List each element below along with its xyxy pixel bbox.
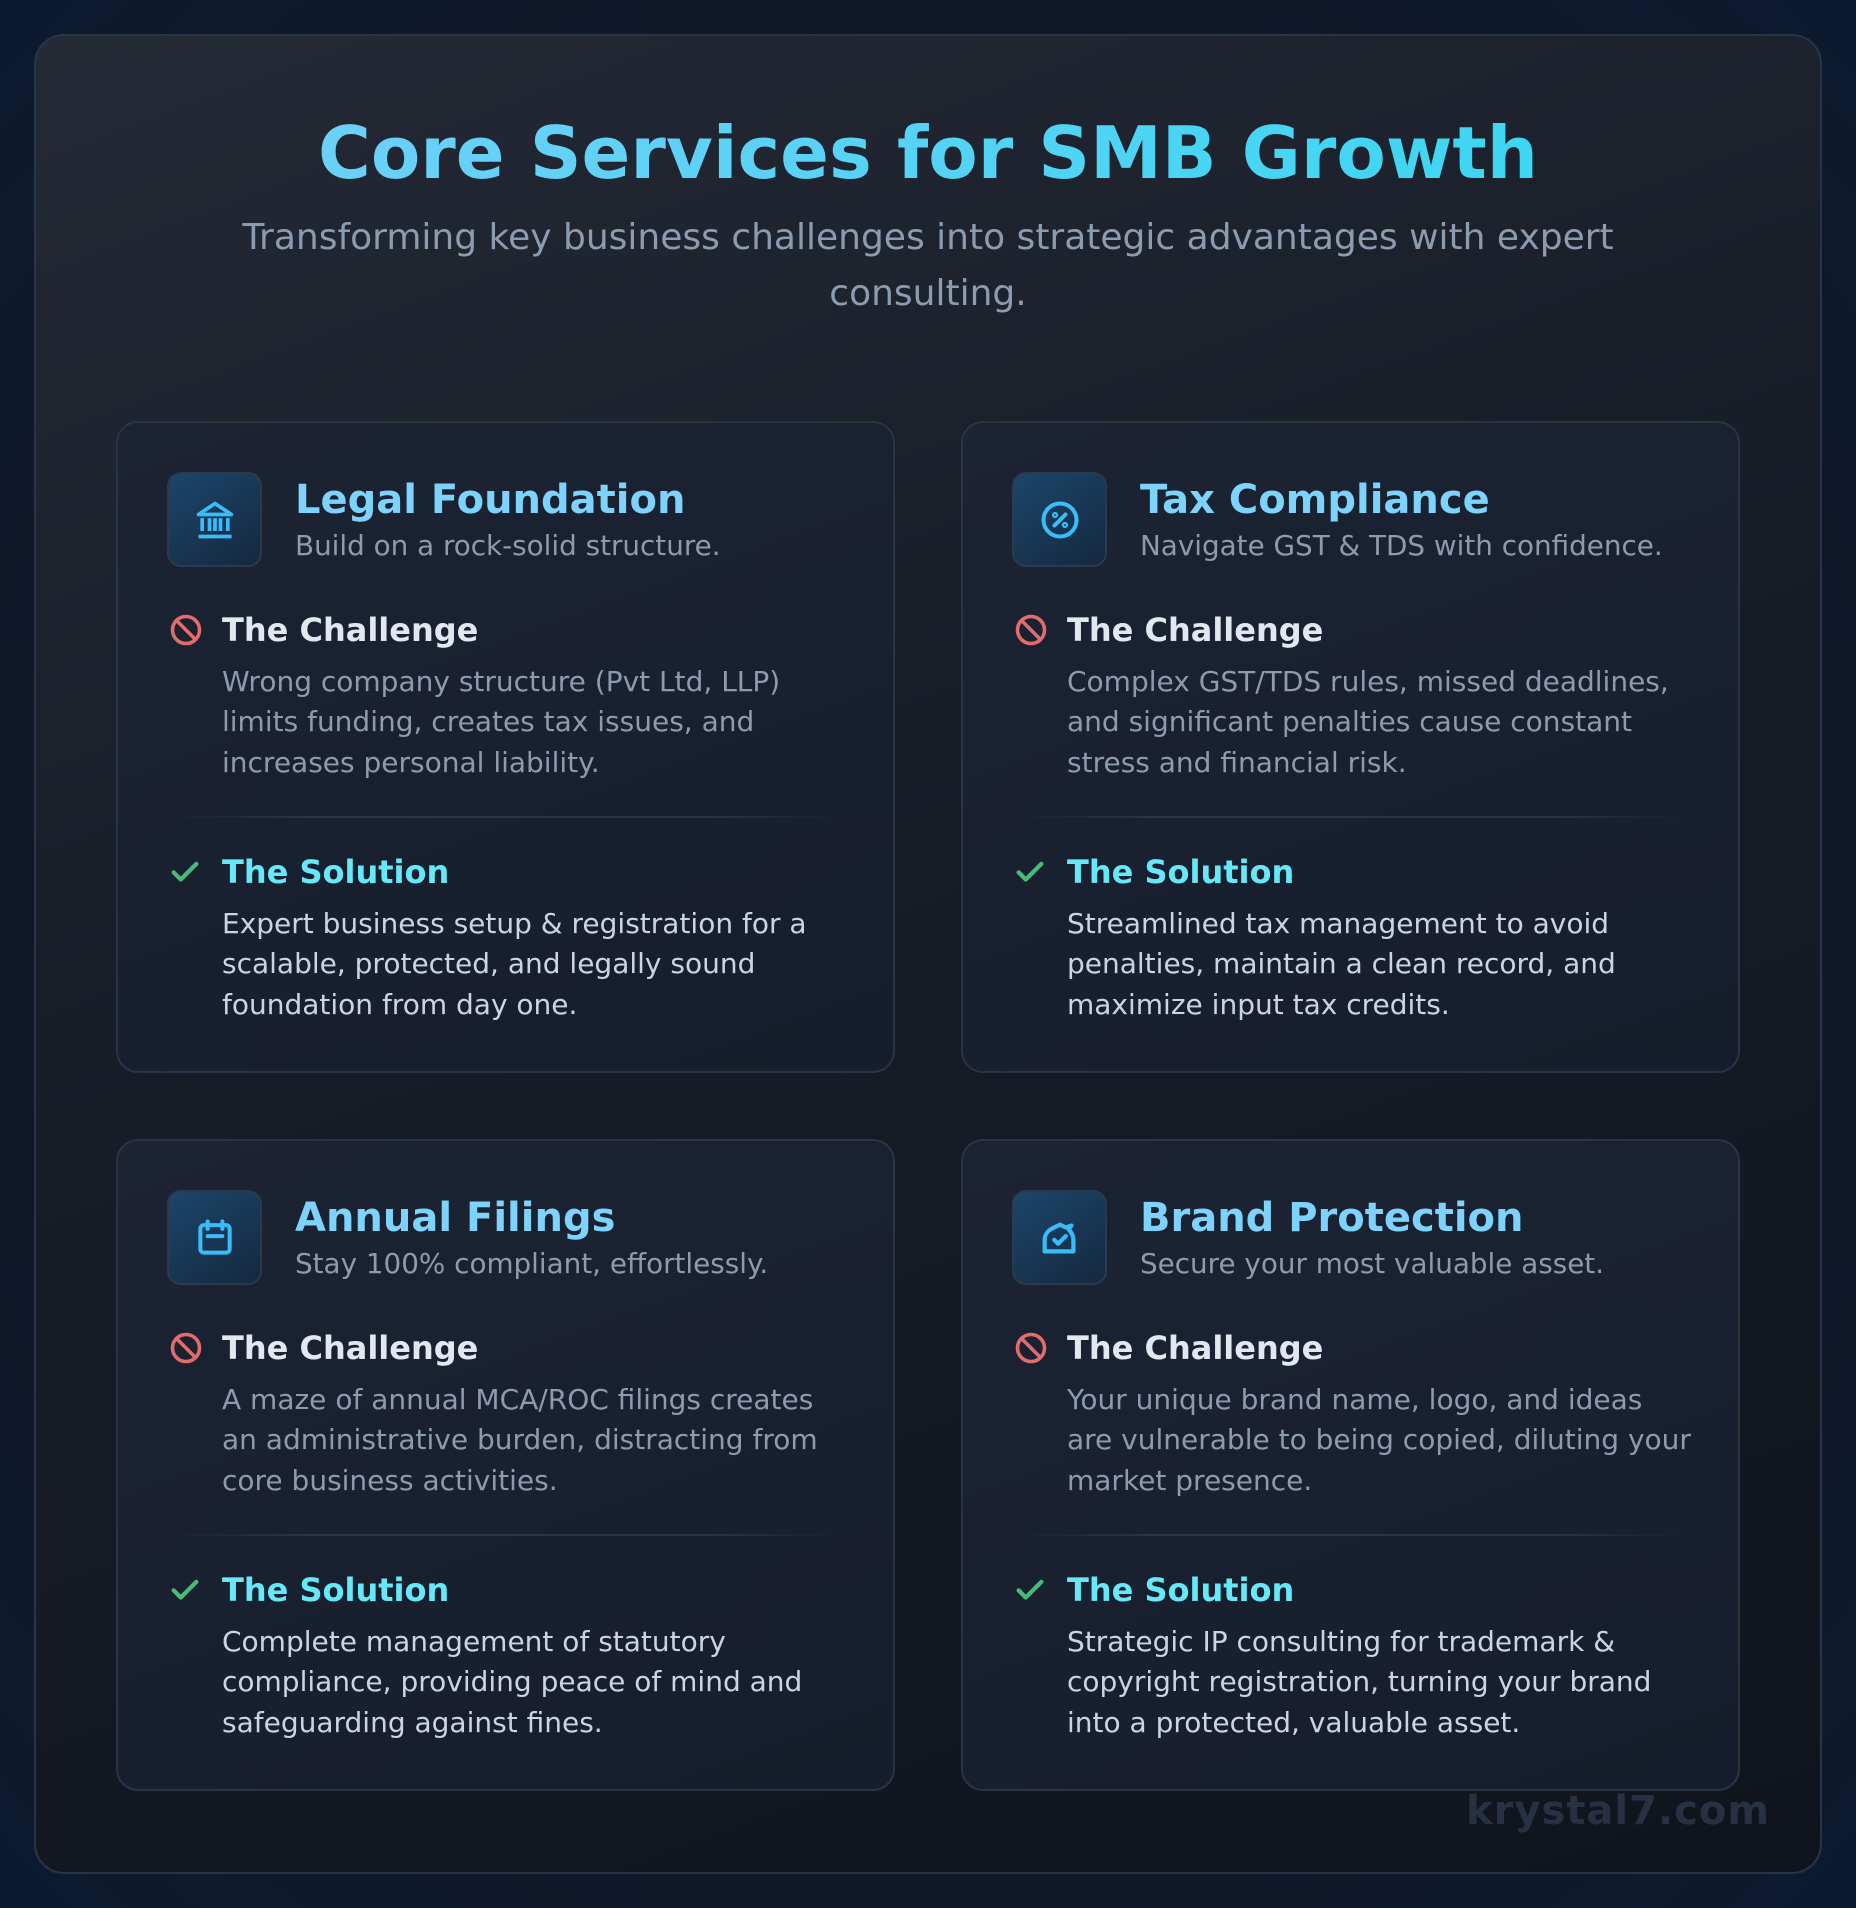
solution heading: The Solution bbox=[222, 853, 449, 891]
heading: Brand Protection bbox=[1140, 1195, 1524, 1241]
challenge text: limits funding, creates tax issues, and bbox=[222, 705, 754, 738]
icon: ban bbox=[1016, 614, 1046, 646]
tagline: Navigate GST & TDS with confidence. bbox=[1140, 529, 1663, 562]
solution text bbox=[1067, 907, 1616, 1021]
icon: ban bbox=[1016, 1332, 1046, 1364]
challenge text: an administrative burden, distracting from bbox=[222, 1423, 818, 1456]
challenge text: Complex GST/TDS rules, missed deadlines, bbox=[1067, 665, 1669, 698]
solution text: penalties, maintain a clean record, and bbox=[1067, 947, 1616, 980]
challenge text bbox=[222, 1383, 818, 1497]
challenge heading: The Challenge bbox=[222, 611, 478, 649]
icon: calendar bbox=[167, 1190, 262, 1285]
challenge heading: The Challenge bbox=[1067, 611, 1323, 649]
challenge text: stress and financial risk. bbox=[1067, 746, 1407, 779]
solution text: maximize input tax credits. bbox=[1067, 988, 1450, 1021]
solution text: Expert business setup & registration for a bbox=[222, 907, 807, 940]
challenge text: market presence. bbox=[1067, 1464, 1312, 1497]
challenge text bbox=[1067, 1383, 1691, 1497]
challenge text: Wrong company structure (Pvt Ltd, LLP) bbox=[222, 665, 780, 698]
solution text: foundation from day one. bbox=[222, 988, 577, 1021]
icon: check bbox=[1016, 1580, 1044, 1600]
challenge text: core business activities. bbox=[222, 1464, 558, 1497]
solution heading: The Solution bbox=[1067, 1571, 1294, 1609]
title: Core Services for SMB Growth bbox=[318, 111, 1538, 195]
solution text bbox=[1067, 1625, 1651, 1739]
watermark: krystal7.com bbox=[1466, 1788, 1770, 1834]
tagline: Stay 100% compliant, effortlessly. bbox=[295, 1247, 768, 1280]
solution text: into a protected, valuable asset. bbox=[1067, 1706, 1520, 1739]
challenge text bbox=[1067, 665, 1669, 779]
solution text: Strategic IP consulting for trademark & bbox=[1067, 1625, 1615, 1658]
icon: shield check bbox=[1012, 1190, 1107, 1285]
solution heading: The Solution bbox=[1067, 853, 1294, 891]
panel: legal foundation bbox=[116, 421, 895, 1073]
challenge text: increases personal liability. bbox=[222, 746, 600, 779]
icon: ban bbox=[170, 614, 202, 646]
icon: check bbox=[172, 1580, 198, 1600]
icon: bank bbox=[167, 472, 262, 567]
solution text: safeguarding against fines. bbox=[222, 1706, 603, 1739]
heading: Annual Filings bbox=[295, 1195, 615, 1241]
challenge text: and significant penalties cause constant bbox=[1067, 705, 1632, 738]
solution text: Streamlined tax management to avoid bbox=[1067, 907, 1609, 940]
solution heading: The Solution bbox=[222, 1571, 449, 1609]
solution text bbox=[222, 1625, 802, 1739]
icon: check bbox=[172, 862, 198, 882]
challenge text bbox=[222, 665, 780, 779]
challenge text: are vulnerable to being copied, diluting your bbox=[1067, 1423, 1691, 1456]
icon: ban bbox=[170, 1332, 202, 1364]
solution text bbox=[222, 907, 807, 1021]
panel: tax compliance bbox=[961, 421, 1740, 1073]
tagline: Secure your most valuable asset. bbox=[1140, 1247, 1604, 1280]
icon: percent bbox=[1012, 472, 1107, 567]
tagline: Build on a rock-solid structure. bbox=[295, 529, 721, 562]
panel: annual filings bbox=[116, 1139, 895, 1791]
challenge heading: The Challenge bbox=[222, 1329, 478, 1367]
icon: check bbox=[1016, 862, 1044, 882]
heading: Legal Foundation bbox=[295, 477, 685, 523]
solution text: Complete management of statutory bbox=[222, 1625, 726, 1658]
subtitle: Transforming key business challenges into strategic advantages with expert consulting. bbox=[242, 217, 1614, 314]
solution text: scalable, protected, and legally sound bbox=[222, 947, 755, 980]
heading: Tax Compliance bbox=[1140, 477, 1490, 523]
panel: brand protection bbox=[961, 1139, 1740, 1791]
challenge heading: The Challenge bbox=[1067, 1329, 1323, 1367]
challenge text: Your unique brand name, logo, and ideas bbox=[1067, 1383, 1642, 1416]
challenge text: A maze of annual MCA/ROC filings creates bbox=[222, 1383, 813, 1416]
solution text: compliance, providing peace of mind and bbox=[222, 1665, 802, 1698]
solution text: copyright registration, turning your brand bbox=[1067, 1665, 1651, 1698]
